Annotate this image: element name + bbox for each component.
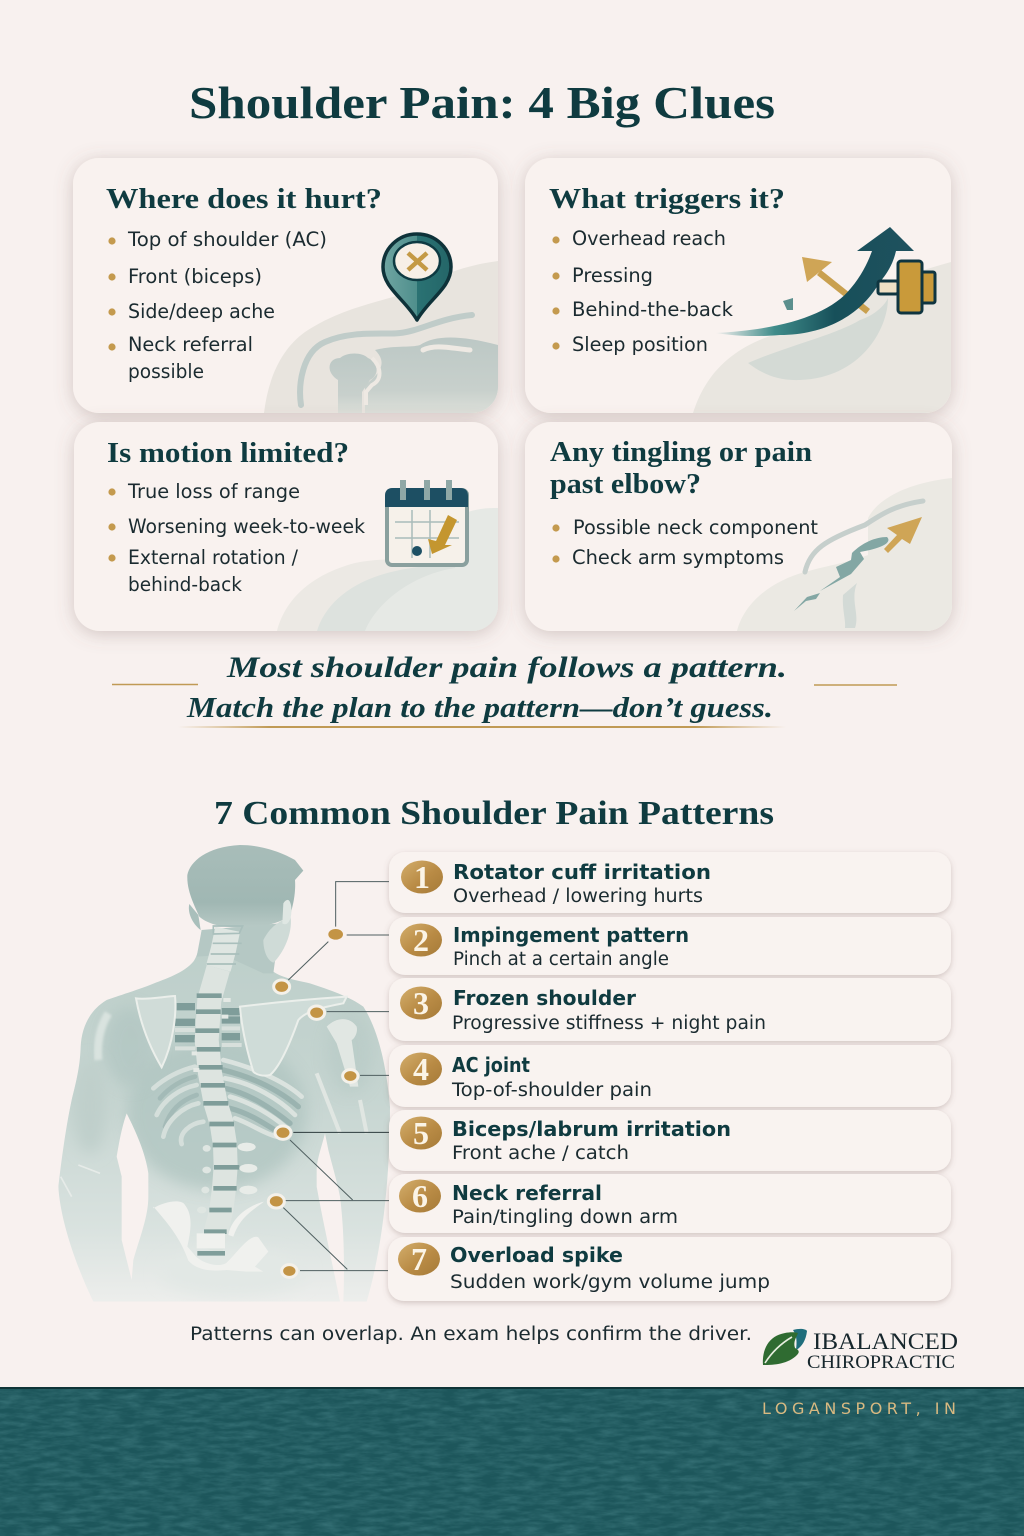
panel: where does it hurt [73,158,498,413]
pattern 2: Impingement pattern [453,923,689,947]
pattern 7: Sudden work/gym volume jump [450,1272,770,1293]
bullet list [552,227,734,356]
upper arm bone [317,1019,367,1133]
panel: tingling past elbow [525,422,952,631]
bullet list: Behind-the-back [572,298,734,321]
icon: dumbbell [878,261,935,313]
icon: leaf [763,1329,807,1365]
scapula right [240,997,347,1076]
callout dots [268,929,358,1277]
panel: tingling past elbow: past elbow? [550,469,701,500]
bullet list: Pressing [572,264,653,287]
bullet list: Possible neck component [573,516,818,539]
pattern 1: Rotator cuff irritation [453,860,711,884]
bullet list: Worsening week-to-week [128,515,366,538]
icon: map pin [383,234,451,320]
bullet list: True loss of range [127,480,300,503]
pattern 7: Overload spike [450,1243,623,1267]
section heading: 7 Common Shoulder Pain Patterns [214,795,774,832]
icon: gold arrow [884,517,922,553]
tagline [112,651,897,728]
pattern 7 [388,1237,951,1301]
pattern 4: AC joint [452,1053,530,1077]
body silhouette [50,927,393,1303]
pattern 1: Overhead / lowering hurts [453,886,703,907]
footnote: Patterns can overlap. An exam helps confirm the driver. [190,1324,752,1345]
heading: Where does it hurt? [106,183,382,215]
heading: What triggers it? [549,183,785,215]
shoulder background [693,262,951,413]
pattern 1 [389,852,951,913]
heading: Any tingling or pain [550,437,812,468]
pattern 5: Biceps/labrum irritation [452,1117,731,1141]
pattern 3: Frozen shoulder [453,986,636,1010]
icon: calendar [385,480,468,565]
pelvis [153,1201,268,1272]
pattern 2: 2 [413,922,429,958]
pattern 5: Front ache / catch [452,1143,629,1164]
tagline: Most shoulder pain follows a pattern. [226,651,787,684]
shoulder background [277,508,498,631]
bullet list: External rotation / [128,546,298,569]
bullet list: Check arm symptoms [572,546,784,569]
pattern 5: 5 [413,1115,429,1151]
icon: rising arrow [715,227,914,336]
bullet list: Side/deep ache [128,300,275,323]
bullet list [108,228,327,383]
logo: CHIROPRACTIC [807,1353,955,1373]
heading: Is motion limited? [107,438,349,469]
panel: is motion limited [74,422,498,631]
logo: IBALANCED [813,1329,958,1354]
panel: what triggers it [525,158,951,413]
spine [192,926,257,1253]
pattern 1: 1 [414,859,430,895]
bullet list: Overhead reach [572,227,726,250]
pattern 4: Top-of-shoulder pain [451,1080,652,1101]
pattern 6: Neck referral [452,1181,602,1205]
shoulder illustration [264,261,498,413]
pattern 6: Pain/tingling down arm [452,1207,678,1228]
bullet list: Neck referral [128,333,253,356]
head [187,845,303,973]
logo [763,1329,958,1373]
pattern 6 [389,1174,951,1233]
pattern 3 [389,978,951,1041]
bullet list: behind-back [128,573,243,596]
arm background [737,478,952,631]
footer band [0,1387,1024,1536]
pattern 5 [389,1110,951,1171]
bullet list: Front (biceps) [128,265,262,288]
pattern 2: Pinch at a certain angle [453,949,669,970]
tagline: Match the plan to the pattern—don’t guess. [186,693,773,724]
pattern 6: 6 [412,1178,428,1214]
icon: gold arrow [802,257,870,314]
pattern 4 [389,1045,951,1107]
figure: back anatomy [50,845,393,1303]
pattern 3: 3 [413,985,429,1021]
scapula left [136,996,175,1067]
bullet list [552,516,818,569]
pattern 7: 7 [411,1241,427,1277]
location label: LOGANSPORT, IN [762,1399,956,1418]
pattern 3: Progressive stiffness + night pain [452,1013,766,1034]
pattern 4: 4 [413,1051,429,1087]
pattern 2 [389,917,951,975]
ribs [153,1007,302,1144]
callout lines [283,882,390,1271]
bullet list [108,480,366,596]
icon: nerve lightning [794,537,888,611]
bullet list: Sleep position [572,333,708,356]
title: Shoulder Pain: 4 Big Clues [189,77,775,128]
bullet list: Top of shoulder (AC) [127,228,327,251]
bullet list: possible [128,360,204,383]
